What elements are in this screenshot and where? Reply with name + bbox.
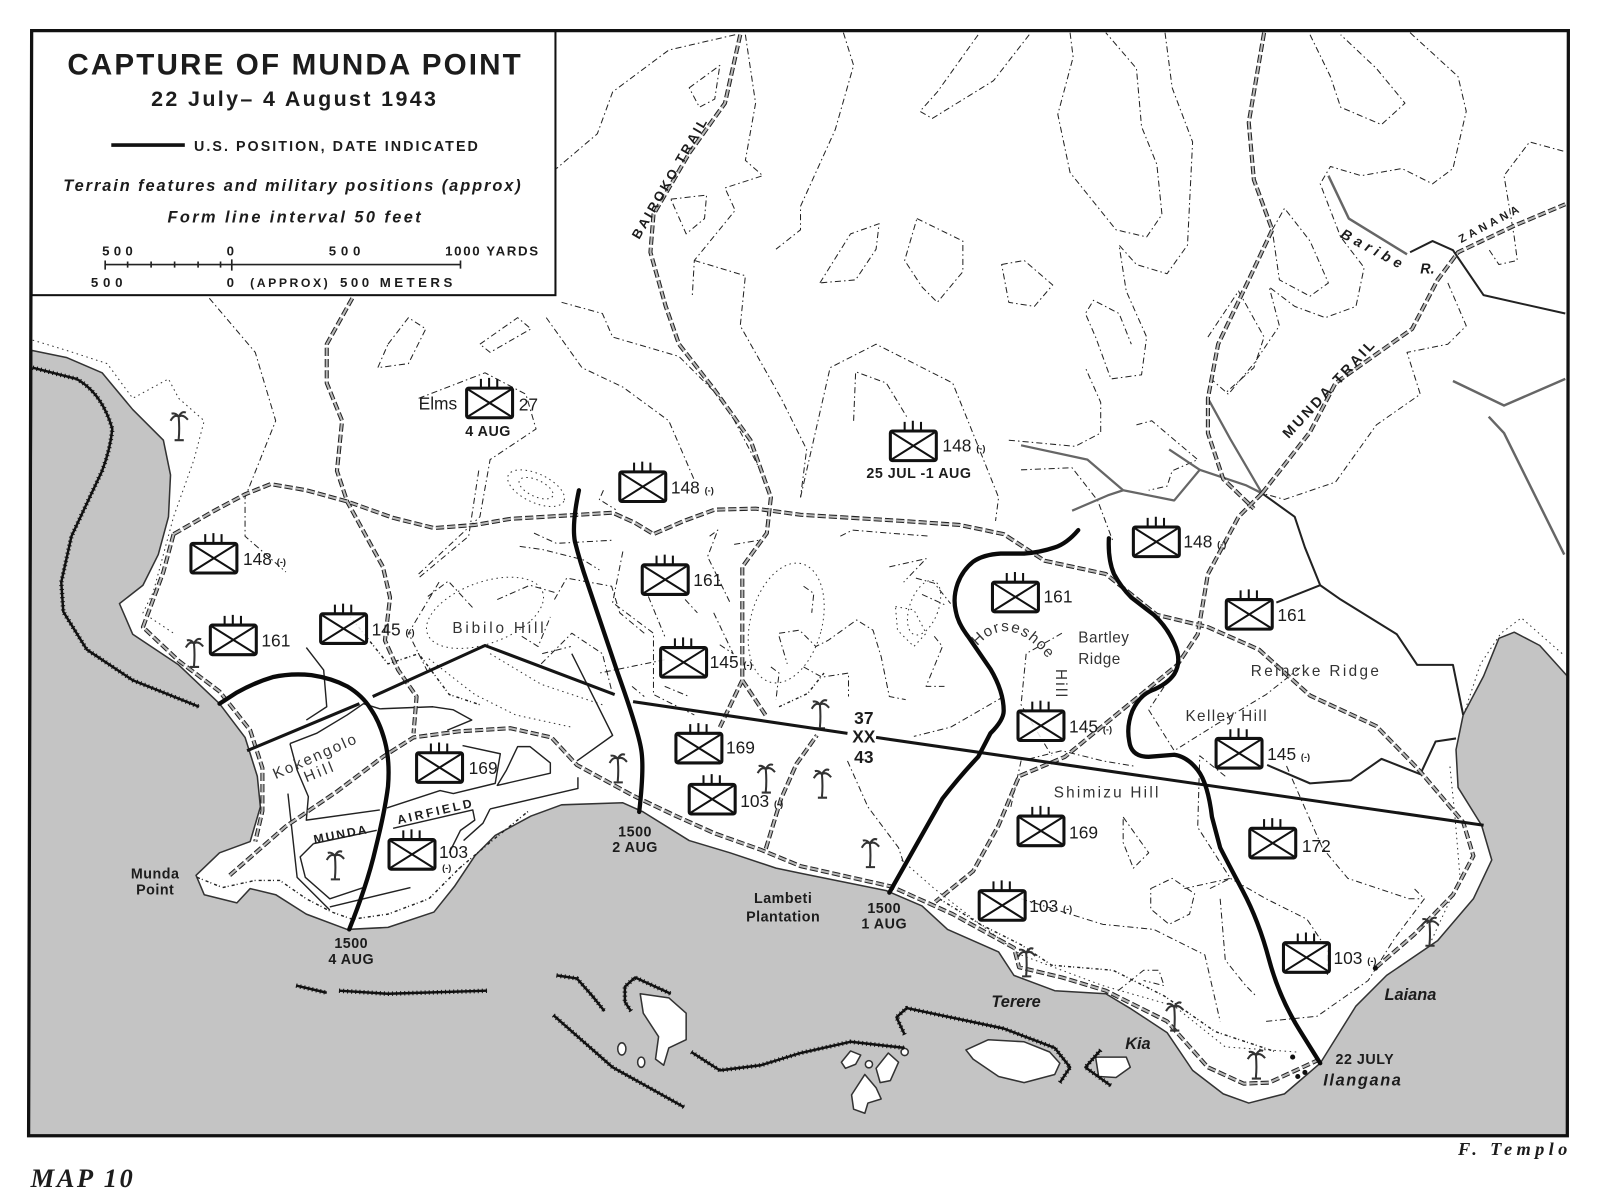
sea and coastline bbox=[29, 350, 1567, 1136]
place labels bbox=[131, 115, 1522, 1090]
scale bar bbox=[91, 243, 538, 290]
unit: 161 east bbox=[1226, 589, 1306, 629]
scale bar: 500 bbox=[329, 243, 360, 258]
division boundary line 37 XX 43 bbox=[247, 645, 1484, 825]
hill label: Kokengolo Hill: Hill bbox=[301, 759, 336, 786]
division boundary line 37 XX 43: XX bbox=[852, 727, 876, 747]
place label: Laiana: Laiana bbox=[1385, 986, 1436, 1004]
legend text: US position: U.S. POSITION, DATE INDICATED bbox=[194, 139, 478, 155]
unit: Elms 27: 27 bbox=[519, 395, 538, 415]
unit: 148 (-) north bbox=[620, 462, 714, 501]
unit: 169 centre: 169 bbox=[726, 738, 755, 758]
unit: 103 (-) airfield bbox=[389, 829, 468, 873]
place label: Lambeti Plantation: Lambeti bbox=[754, 891, 812, 907]
unit: 161 east: 161 bbox=[1277, 605, 1306, 625]
date label: 1500 4 Aug bbox=[328, 936, 374, 968]
place label: Terere: Terere bbox=[991, 993, 1041, 1011]
unit: 148 (-) 25 Jul-1 Aug: 148 (-) bbox=[942, 435, 985, 455]
place label: Kia: Kia bbox=[1125, 1035, 1151, 1053]
date label: 1500 1 Aug: 1500 bbox=[867, 901, 901, 917]
airfield and streams bbox=[288, 648, 613, 910]
trail label: Zanana: ZANANA bbox=[1457, 203, 1522, 246]
trail label: Munda: MUNDA TRAIL bbox=[1280, 337, 1379, 442]
unit: 103 (-) south bbox=[979, 880, 1072, 920]
village dots at Ilangana bbox=[1290, 966, 1378, 1079]
subtitle dates: 22 July– 4 August 1943 bbox=[151, 87, 436, 111]
hill label: Reincke Ridge: Reincke Ridge bbox=[1251, 663, 1379, 680]
scale bar: (APPROX) bbox=[250, 276, 328, 290]
scale bar: 0 bbox=[227, 275, 234, 290]
scale bar: 500 bbox=[102, 243, 133, 258]
position line: 4 Aug bbox=[220, 674, 389, 929]
position line: 2 Aug bbox=[574, 490, 642, 812]
hill label: Bartley Ridge: Bartley bbox=[1078, 629, 1129, 646]
hill label: Bartley Ridge bbox=[1078, 629, 1129, 668]
unit: 145 (-) ridge bbox=[1018, 701, 1112, 740]
unit: 103 (-) east bbox=[1283, 932, 1376, 972]
river label: R.: R. bbox=[1420, 262, 1435, 278]
unit: 148 (-) west bbox=[191, 533, 286, 573]
unit: 161 centre bbox=[642, 555, 722, 594]
unit: 103 (-) centre bbox=[689, 774, 783, 814]
hill label: Kelley Hill: Kelley Hill bbox=[1185, 708, 1267, 725]
unit: 103 (-) airfield: 103 bbox=[439, 842, 468, 862]
place label: Munda Point: Point bbox=[136, 883, 174, 899]
unit: 148 (-) west: 148 (-) bbox=[243, 549, 286, 569]
date label: 1500 1 Aug: 1 AUG bbox=[861, 916, 907, 932]
units bbox=[191, 378, 1376, 972]
date label: 1500 2 Aug: 2 AUG bbox=[612, 840, 658, 856]
unit: 148 (-) north: 148 (-) bbox=[671, 477, 714, 497]
unit: 169 airfield bbox=[417, 743, 498, 782]
division boundary line 37 XX 43: 43 bbox=[854, 747, 874, 767]
unit: 161 west: 161 bbox=[261, 631, 290, 651]
date label: 1500 4 Aug: 1500 bbox=[334, 936, 368, 952]
unit: 169 south bbox=[1018, 806, 1098, 846]
river label: Baribe: Baribe bbox=[1338, 226, 1405, 272]
unit: 148 (-) east bbox=[1133, 517, 1226, 557]
place label: Munda Point bbox=[131, 866, 180, 899]
unit: 161 ridge: 161 bbox=[1044, 587, 1072, 607]
place label: Ilangana: Ilangana bbox=[1323, 1072, 1401, 1090]
palm icons bbox=[171, 412, 1439, 1079]
panel: legend bbox=[32, 31, 555, 295]
unit: 103 (-) airfield: (-) bbox=[442, 863, 451, 873]
unit: 145 (-) east: 145 (-) bbox=[1267, 744, 1310, 764]
unit: Elms 27: 4 AUG bbox=[465, 424, 511, 440]
unit: 148 (-) 25 Jul-1 Aug bbox=[866, 421, 985, 482]
unit: Elms 27 bbox=[419, 378, 538, 440]
unit: 145 (-) centre bbox=[661, 637, 753, 677]
unit: 169 centre bbox=[676, 723, 755, 763]
hill label: Kokengolo: Kokengolo bbox=[270, 731, 359, 783]
date label: 22 July: 22 JULY bbox=[1336, 1052, 1394, 1068]
airfield label: Airfield: AIRFIELD bbox=[396, 796, 474, 827]
legend line sample bbox=[111, 143, 185, 147]
unit: 103 (-) centre: 103 (-) bbox=[740, 791, 783, 811]
unit: 148 (-) 25 Jul-1 Aug: 25 JUL -1 AUG bbox=[866, 466, 971, 482]
division boundary line 37 XX 43: 37 bbox=[854, 708, 873, 728]
date label: 1500 2 Aug bbox=[612, 824, 658, 856]
unit: 172 bbox=[1250, 818, 1331, 858]
rivers bbox=[1021, 176, 1565, 783]
position line: 1 Aug bbox=[889, 530, 1078, 893]
note: terrain features: Terrain features and military positions (approx) bbox=[63, 177, 521, 195]
airfield label: Munda: MUNDA bbox=[312, 822, 369, 847]
US position lines bbox=[220, 490, 1320, 1063]
reefs bbox=[33, 368, 1111, 1107]
position line: 22 July bbox=[1109, 538, 1320, 1063]
unit: 169 south: 169 bbox=[1069, 823, 1098, 843]
map number caption: MAP 10 bbox=[30, 1163, 133, 1193]
hill label: Bartley Ridge: Ridge bbox=[1078, 651, 1121, 668]
cartographer credit: F. Templo bbox=[1457, 1139, 1567, 1159]
date label: 1500 2 Aug: 1500 bbox=[618, 824, 652, 840]
scale bar: 0 bbox=[227, 243, 234, 258]
unit: 145 (-) east bbox=[1216, 728, 1310, 768]
place label: Lambeti Plantation: Plantation bbox=[746, 909, 820, 925]
place label: Lambeti Plantation bbox=[746, 891, 820, 925]
trails bbox=[143, 33, 1565, 1084]
date label: 1500 4 Aug: 4 AUG bbox=[328, 952, 374, 968]
hill label: Shimizu Hill: Shimizu Hill bbox=[1054, 785, 1159, 802]
unit: 148 (-) east: 148 (-) bbox=[1183, 531, 1226, 551]
note: form line interval: Form line interval 50 feet bbox=[167, 209, 421, 227]
hill label: Bibilo Hill: Bibilo Hill bbox=[452, 620, 544, 637]
unit: 161 west bbox=[210, 615, 290, 655]
unit: 145 (-) west bbox=[321, 604, 415, 643]
trail label: Bairoko: BAIROKO TRAIL bbox=[629, 115, 711, 242]
unit: 145 (-) ridge: 145 (-) bbox=[1069, 716, 1112, 736]
hill label: Horseshoe Hill: Hill bbox=[1052, 669, 1069, 698]
unit: 161 centre: 161 bbox=[693, 570, 722, 590]
title: CAPTURE OF MUNDA POINT bbox=[67, 49, 521, 82]
unit: 103 (-) east: 103 (-) bbox=[1334, 948, 1376, 968]
hill label: Horseshoe: Horseshoe bbox=[971, 623, 1052, 657]
unit: 145 (-) centre: 145 (-) bbox=[710, 652, 753, 672]
place label: Munda Point: Munda bbox=[131, 866, 180, 882]
islands bbox=[618, 994, 1130, 1113]
scale bar: 500 METERS bbox=[340, 275, 452, 290]
unit: Elms 27: Elms bbox=[419, 394, 458, 414]
unit: 145 (-) west: 145 (-) bbox=[372, 619, 415, 639]
unit: 161 ridge bbox=[992, 572, 1072, 612]
scale bar: 500 bbox=[91, 275, 123, 290]
date label: 1500 1 Aug bbox=[861, 901, 907, 932]
unit: 172: 172 bbox=[1302, 836, 1331, 856]
scale bar: 1000 YARDS bbox=[445, 243, 538, 258]
unit: 103 (-) south: 103 (-) bbox=[1029, 896, 1072, 916]
unit: 169 airfield: 169 bbox=[469, 758, 498, 778]
